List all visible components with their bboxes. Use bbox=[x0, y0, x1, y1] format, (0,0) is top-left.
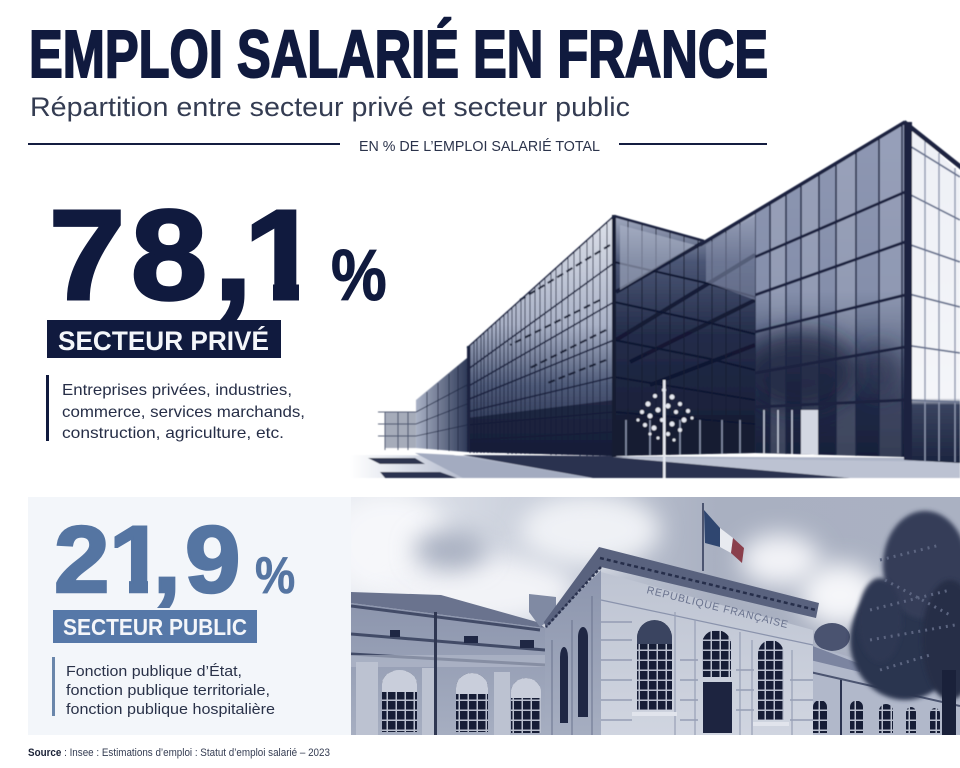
big stat: public sector bbox=[56, 524, 294, 608]
central recessed section bbox=[614, 213, 755, 457]
description: private sector: commerce, services marchands, bbox=[62, 404, 305, 421]
badge: secteur privé: SECTEUR PRIVÉ bbox=[58, 325, 269, 356]
description: public sector: Fonction publique d’État, bbox=[66, 663, 242, 680]
cornice bbox=[544, 547, 819, 628]
big stat: public sector: % bbox=[255, 547, 295, 605]
inscription: REPUBLIQUE FRANÇAISE bbox=[645, 584, 789, 631]
big stat: private sector: 7 bbox=[49, 184, 125, 327]
description: public sector: fonction publique hospitalière bbox=[66, 701, 275, 718]
flag on pole bbox=[702, 503, 744, 571]
pavilion left face bbox=[545, 570, 601, 735]
big stat: private sector: % bbox=[331, 236, 387, 316]
sky and clouds bbox=[351, 497, 960, 705]
right wing bbox=[810, 645, 960, 735]
description: public sector: fonction publique territoriale, bbox=[66, 682, 270, 699]
big stat: public sector: , bbox=[153, 506, 181, 612]
description: public sector bbox=[52, 657, 275, 718]
subtitle: Répartition entre secteur privé et secteur public bbox=[30, 92, 630, 122]
description: private sector bbox=[46, 375, 305, 442]
front windows and door bbox=[632, 620, 789, 733]
badge: secteur public: SECTEUR PUBLIC bbox=[63, 614, 247, 640]
photo: public-sector government building bbox=[330, 493, 960, 735]
big stat: public sector: 1 bbox=[109, 506, 164, 612]
ground and road bbox=[350, 453, 960, 478]
pavilion front face bbox=[601, 572, 813, 735]
young tree bbox=[636, 380, 694, 478]
description: private sector: construction, agriculture, etc. bbox=[62, 425, 284, 442]
big stat: private sector: 1 bbox=[244, 184, 320, 327]
panel: public sector bbox=[28, 497, 351, 735]
large tree bbox=[850, 511, 960, 735]
big stat: public sector: 2 bbox=[54, 506, 109, 612]
title: EMPLOI SALARIÉ EN FRANCE bbox=[29, 16, 768, 92]
left wing bbox=[351, 592, 556, 735]
big stat: private sector: 8 bbox=[131, 184, 207, 327]
source note: Source : Insee : Estimations d’emploi : Statut d’emploi salarié – 2023 bbox=[28, 747, 330, 759]
main corner facade grid bbox=[754, 124, 905, 458]
big stat: private sector bbox=[49, 184, 387, 327]
left wing facade grid bbox=[467, 217, 614, 456]
wing windows bbox=[382, 670, 541, 733]
unit label with rules: EN % DE L’EMPLOI SALARIÉ TOTAL bbox=[359, 138, 600, 155]
far wing bbox=[378, 358, 467, 452]
big stat: private sector: , bbox=[214, 184, 252, 327]
big stat: public sector: 9 bbox=[185, 506, 240, 612]
photo: private-sector glass office building bbox=[350, 120, 960, 478]
background tree bbox=[814, 623, 850, 651]
description: private sector: Entreprises privées, industries, bbox=[62, 382, 292, 399]
right side facade bbox=[467, 122, 960, 463]
